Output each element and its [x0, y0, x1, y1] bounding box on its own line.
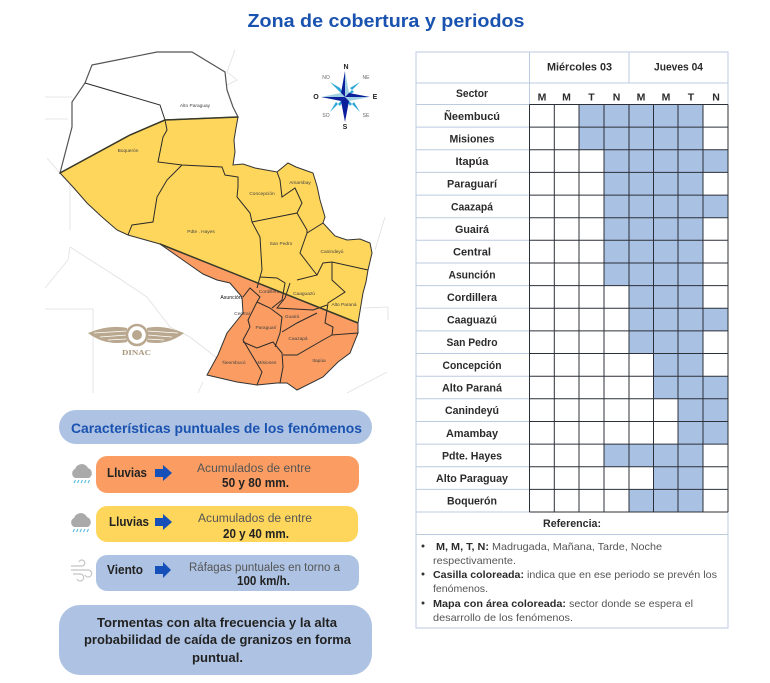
callout: storms and hail: Tormentas con alta frecuencia y la alta	[97, 616, 338, 630]
map labels: Alto Paraguay	[180, 103, 211, 109]
arrow	[155, 562, 171, 578]
legend: referencia: respectivamente.	[433, 555, 516, 567]
legend: referencia: fenómenos.	[433, 583, 488, 595]
icon: compass rose: E	[373, 94, 378, 101]
legend: referencia: Casilla coloreada:	[433, 569, 524, 581]
map labels: Alto Paraná	[331, 302, 357, 308]
legend: referencia: indica que en ese periodo se prevén los	[527, 569, 717, 581]
panel: wind gusts: Viento	[107, 563, 143, 577]
sector names: Itapúa	[456, 156, 489, 168]
title: Zona de cobertura y periodos	[248, 11, 524, 31]
panel: wind gusts	[96, 555, 359, 591]
map labels: Guairá	[285, 314, 300, 320]
sector names: Boquerón	[447, 496, 497, 508]
icon: compass rose: SE	[363, 113, 370, 119]
map labels: Asunción	[220, 295, 242, 301]
day headers: N	[613, 92, 620, 104]
icon: heavy rain cloud	[72, 464, 92, 483]
icon: compass rose: S	[343, 124, 348, 131]
sector names: Amambay	[446, 428, 499, 440]
legend: referencia: Madrugada, Mañana, Tarde, Noche	[492, 541, 662, 553]
coloured period cells	[579, 104, 728, 512]
header grid	[416, 52, 728, 628]
icon: compass rose	[313, 64, 378, 131]
region: orange zone	[160, 244, 358, 390]
schedule table	[416, 52, 728, 628]
map labels: Misiones	[258, 360, 277, 366]
map labels: Central	[234, 311, 250, 317]
sector names: San Pedro	[446, 337, 498, 349]
day headers: T	[588, 92, 595, 104]
map labels: Concepción	[249, 191, 275, 197]
map labels: Caazapá	[288, 336, 308, 342]
map labels: Caaguazú	[293, 291, 315, 297]
sector names: Ñeembucú	[444, 110, 500, 123]
panel: rain 20 to 40 mm: Lluvias	[109, 515, 149, 529]
logo: DINAC: DINAC	[122, 348, 151, 357]
sector names: Alto Paraná	[442, 382, 503, 394]
sector names: Asunción	[448, 269, 496, 281]
icon: compass rose: O	[313, 94, 319, 101]
panel: rain 50 to 80 mm: Acumulados de entre	[197, 463, 311, 475]
sector names: Caazapá	[451, 201, 494, 213]
logo: DINAC	[88, 325, 184, 357]
legend: referencia: desarrollo de los fenómenos.	[433, 612, 573, 624]
day headers: T	[688, 92, 695, 104]
icon: moderate rain cloud	[71, 513, 91, 532]
callout: storms and hail	[59, 605, 372, 675]
sector names: Canindeyú	[445, 405, 499, 417]
map labels: Boquerón	[118, 148, 139, 154]
sector names: Cordillera	[447, 292, 498, 304]
icon: wind	[71, 560, 92, 581]
icon: compass rose: N	[343, 64, 349, 71]
map labels: Ñeembucú	[222, 359, 246, 366]
sector names: Guairá	[455, 224, 490, 236]
sector names: Misiones	[450, 133, 494, 145]
icon: compass rose: SO	[322, 113, 330, 119]
panel: rain 50 to 80 mm: 50 y 80 mm.	[222, 476, 289, 490]
panel: rain 50 to 80 mm: Lluvias	[107, 466, 147, 480]
day headers: M	[538, 92, 547, 104]
day headers	[456, 62, 720, 104]
panel: wind gusts: 100 km/h.	[237, 574, 290, 588]
day headers: N	[712, 92, 720, 104]
panel: rain 50 to 80 mm	[96, 456, 359, 493]
day headers: Sector	[456, 88, 489, 100]
callout: storms and hail: probabilidad de caída de granizos en forma	[84, 633, 352, 647]
day headers: Miércoles 03	[547, 62, 612, 74]
map labels	[118, 103, 357, 366]
sector names: Paraguarí	[447, 179, 498, 191]
sector names: Central	[453, 247, 491, 259]
sector names: Caaguazú	[447, 315, 497, 327]
panel: rain 20 to 40 mm: 20 y 40 mm.	[223, 527, 289, 541]
legend: referencia	[422, 518, 717, 624]
arrow	[155, 514, 172, 530]
legend: referencia: Mapa con área coloreada:	[433, 598, 566, 610]
legend: referencia: Referencia:	[543, 518, 601, 530]
period grid	[530, 104, 728, 512]
legend: referencia: sector donde se espera el	[569, 598, 693, 610]
day headers: M	[637, 92, 646, 104]
panel: characteristics heading	[59, 410, 372, 444]
icon: compass rose: NO	[322, 75, 330, 81]
panel: characteristics heading: Características puntuales de los fenómenos	[71, 420, 362, 436]
map labels: Canindeyú	[321, 249, 344, 255]
legend: referencia: M, M, T, N:	[436, 541, 489, 553]
sector names: Concepción	[442, 360, 502, 372]
region: Alto Paraguay and northern Boquerón (white)	[60, 52, 238, 173]
region: yellow zone	[60, 117, 372, 323]
map labels: Pdte . Hayes	[187, 229, 215, 235]
sector names: Pdte. Hayes	[442, 450, 502, 462]
panel: rain 20 to 40 mm	[96, 506, 358, 542]
arrow	[155, 465, 172, 481]
panel: rain 20 to 40 mm: Acumulados de entre	[198, 513, 312, 525]
map of Paraguay	[45, 50, 388, 393]
map labels: Paraguarí	[255, 325, 277, 331]
day headers: M	[662, 92, 671, 104]
sector names: Alto Paraguay	[436, 473, 509, 485]
icon: compass rose: NE	[363, 75, 370, 81]
sector names	[436, 110, 509, 508]
map labels: Amambay	[289, 180, 311, 186]
map labels: Itapúa	[312, 358, 326, 364]
day headers: M	[562, 92, 571, 104]
map labels: San Pedro	[270, 241, 293, 247]
panel: wind gusts: Ráfagas puntuales en torno a	[189, 562, 341, 574]
map labels: Cordillera	[259, 289, 280, 295]
day headers: Jueves 04	[654, 62, 704, 74]
callout: storms and hail: puntual.	[192, 651, 243, 665]
